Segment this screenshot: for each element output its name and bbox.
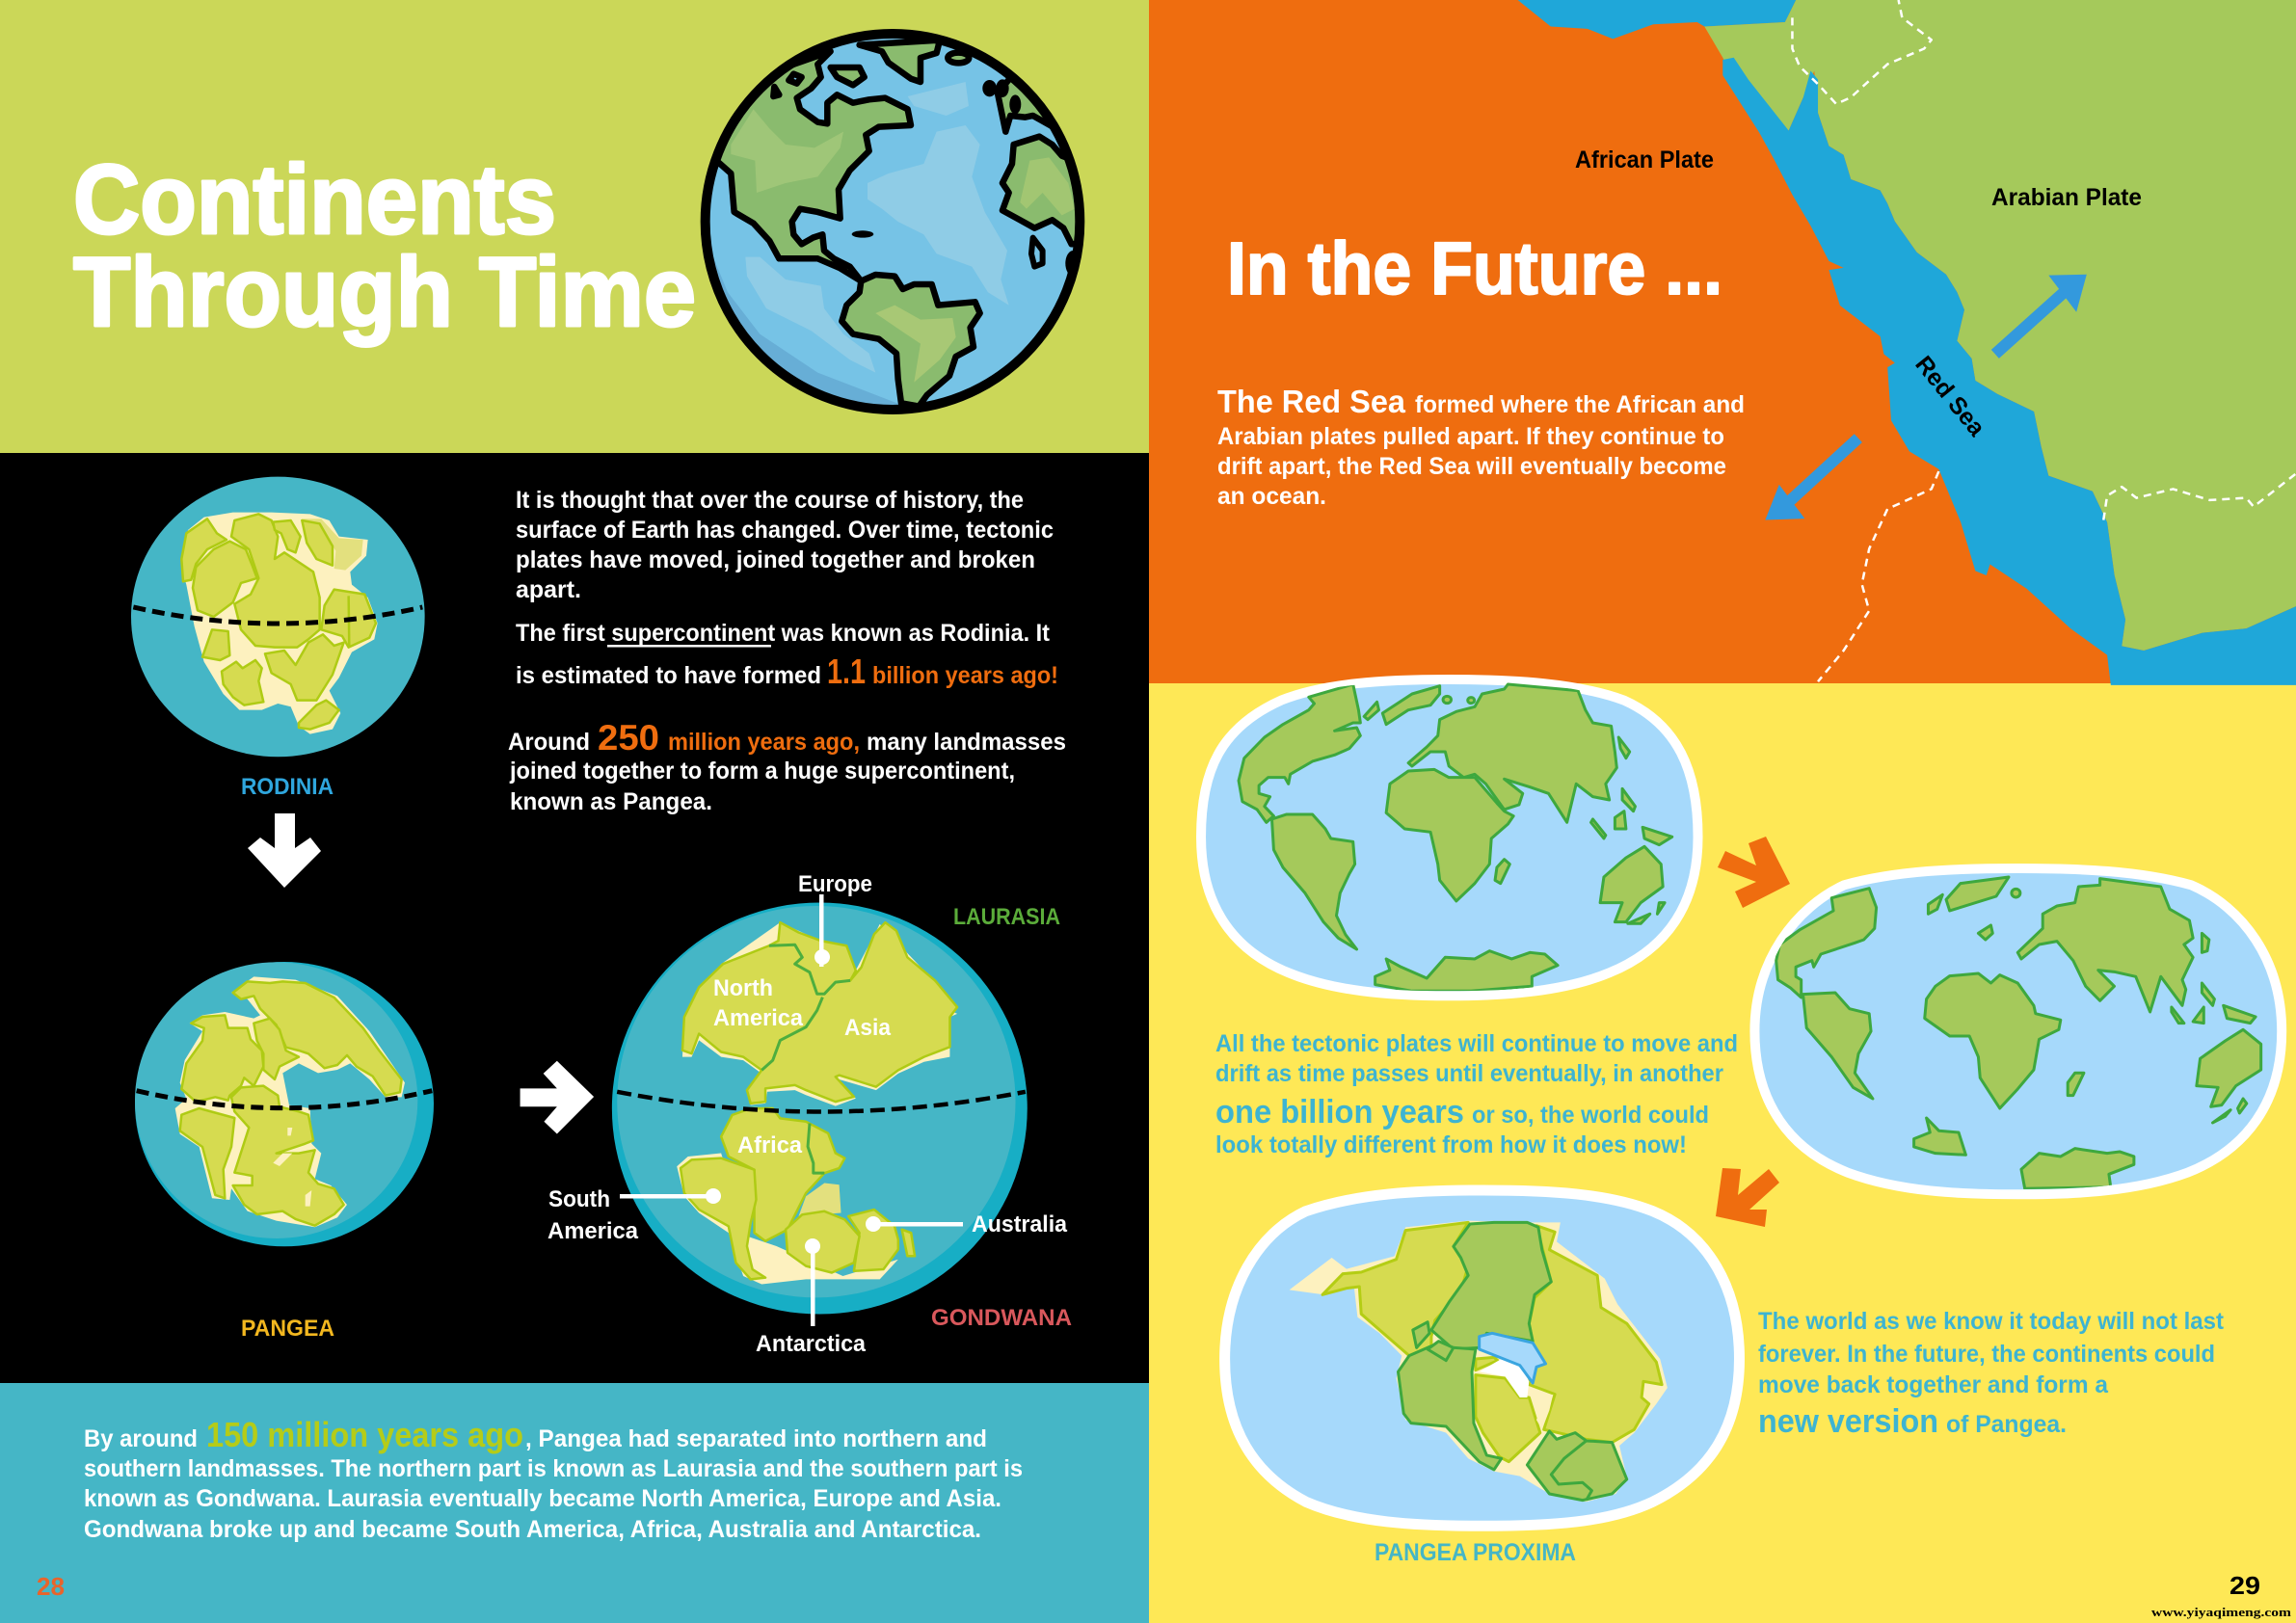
label: Laurasia: LAURASIA bbox=[953, 904, 1060, 930]
text block: 150 million years ago: , Pangea had separated into northern and bbox=[525, 1425, 987, 1452]
text block: 150 million years ago bbox=[84, 1415, 1023, 1543]
text block: intro and Rodinia: The first supercontinent was known as Rodinia. It bbox=[516, 620, 1051, 647]
text block: intro and Rodinia: billion years ago! bbox=[872, 662, 1058, 689]
icon: cartoon Earth globe bbox=[706, 34, 1101, 414]
text block: The Red Sea: an ocean. bbox=[1217, 483, 1326, 510]
text block: Pangea 250 million years ago: known as Pangea. bbox=[510, 788, 712, 815]
text block: new version of Pangea: of Pangea. bbox=[1946, 1411, 2067, 1438]
title: Continents bbox=[73, 145, 556, 254]
text block: The Red Sea: drift apart, the Red Sea will eventually become bbox=[1217, 453, 1726, 480]
text block: intro and Rodinia: It is thought that over the course of history, the bbox=[516, 487, 1024, 514]
arrow: Rodinia to Pangea bbox=[248, 813, 321, 888]
map: Pangea Proxima bbox=[1225, 1190, 1739, 1526]
text block: tectonic plates continue: one billion years bbox=[1215, 1094, 1464, 1131]
map: Red Sea region bbox=[1518, 0, 2296, 685]
text block: The Red Sea: The Red Sea bbox=[1217, 384, 1406, 419]
text block: 150 million years ago: Gondwana broke up and became South America, Africa, Australia and Antarctica. bbox=[84, 1516, 981, 1543]
text block: 150 million years ago: southern landmasses. The northern part is known as Laurasia and the southern part is bbox=[84, 1455, 1023, 1482]
text block: 150 million years ago: known as Gondwana. Laurasia eventually became North America, Europe and Asia. bbox=[84, 1485, 1001, 1512]
text block: new version of Pangea bbox=[1758, 1308, 2225, 1440]
text block: tectonic plates continue: or so, the world could bbox=[1472, 1102, 1709, 1129]
label: Asia: Asia bbox=[844, 1015, 892, 1041]
text block: intro and Rodinia: plates have moved, joined together and broken bbox=[516, 546, 1035, 573]
text block: new version of Pangea: forever. In the future, the continents could bbox=[1758, 1341, 2215, 1368]
panel: yellow future background bbox=[1149, 683, 2296, 1623]
panel: orange Red Sea background bbox=[1149, 0, 2296, 684]
label: Africa: Africa bbox=[737, 1132, 803, 1158]
arrow: African plate direction bbox=[1765, 439, 1858, 520]
map: Laurasia and Gondwana globe bbox=[612, 902, 1028, 1315]
label: Pangea Proxima: PANGEA PROXIMA bbox=[1375, 1539, 1576, 1566]
map: Rodinia globe bbox=[131, 477, 425, 757]
label: Arabian Plate: Arabian Plate bbox=[1991, 184, 2142, 211]
text block: Pangea 250 million years ago: joined together to form a huge supercontinent, bbox=[509, 758, 1015, 785]
label: Gondwana: GONDWANA bbox=[931, 1305, 1072, 1331]
panel: black history background bbox=[0, 453, 1149, 1384]
callout: South America pointer: America bbox=[547, 1218, 639, 1244]
callout: Antarctica pointer: Antarctica bbox=[756, 1331, 867, 1357]
callout: Australia pointer bbox=[866, 1211, 1068, 1237]
heading: In the Future: In the Future ... bbox=[1227, 227, 1722, 310]
label: Pangea: PANGEA bbox=[241, 1316, 334, 1342]
map: Pangea globe bbox=[135, 962, 434, 1246]
title bbox=[73, 145, 696, 347]
text block: The Red Sea: formed where the African and bbox=[1415, 391, 1745, 418]
text block: tectonic plates continue: All the tectonic plates will continue to move and bbox=[1215, 1030, 1738, 1057]
arrow: world today to drifting world bbox=[1718, 837, 1790, 908]
page number 28: 28 bbox=[37, 1572, 65, 1601]
callout: Australia pointer: Australia bbox=[972, 1211, 1068, 1237]
label: North America: America bbox=[713, 1005, 804, 1031]
text block: Pangea 250 million years ago: 250 bbox=[598, 718, 659, 758]
text block: intro and Rodinia: apart. bbox=[516, 576, 581, 603]
text block: new version of Pangea: move back together and form a bbox=[1758, 1371, 2109, 1398]
callout: South America pointer bbox=[547, 1186, 721, 1244]
page number 29: 29 bbox=[2229, 1571, 2260, 1600]
label: North America: North bbox=[713, 975, 773, 1001]
panel: lime title background bbox=[0, 0, 1149, 453]
title: Through Time bbox=[73, 237, 696, 347]
arrow: Arabian plate direction bbox=[1995, 275, 2087, 354]
text block: intro and Rodinia: is estimated to have formed bbox=[516, 662, 821, 689]
text block: intro and Rodinia: 1.1 bbox=[827, 652, 866, 691]
text block: tectonic plates continue bbox=[1215, 1030, 1738, 1158]
text block: Pangea 250 million years ago: million years ago, bbox=[668, 729, 860, 756]
text block: new version of Pangea: new version bbox=[1758, 1403, 1938, 1440]
text block: 150 million years ago: 150 million years ago bbox=[206, 1415, 523, 1454]
arrow: drifting world to Pangea Proxima bbox=[1716, 1168, 1779, 1227]
text block: Pangea 250 million years ago: Around bbox=[508, 729, 590, 756]
text block: The Red Sea bbox=[1217, 384, 1745, 510]
map: world today bbox=[1201, 679, 1698, 996]
callout: Europe pointer bbox=[798, 871, 872, 967]
panel: teal footer background bbox=[0, 1383, 1149, 1623]
arrow: Pangea to Laurasia and Gondwana bbox=[521, 1061, 594, 1134]
text block: Pangea 250 million years ago bbox=[508, 718, 1066, 815]
label: North America bbox=[713, 975, 804, 1031]
label: Red Sea: Red Sea bbox=[1909, 351, 1990, 442]
text block: intro and Rodinia: surface of Earth has changed. Over time, tectonic bbox=[516, 517, 1054, 544]
text block: The Red Sea: Arabian plates pulled apart. If they continue to bbox=[1217, 423, 1724, 450]
callout: South America pointer: South bbox=[548, 1186, 610, 1212]
text block: Pangea 250 million years ago: many landmasses bbox=[867, 729, 1066, 756]
text block: tectonic plates continue: look totally different from how it does now! bbox=[1215, 1131, 1687, 1158]
text block: new version of Pangea: The world as we know it today will not last bbox=[1758, 1308, 2225, 1335]
callout: Europe pointer: Europe bbox=[798, 871, 872, 897]
text block: intro and Rodinia bbox=[516, 487, 1058, 691]
watermark: www.yiyaqimeng.com bbox=[2151, 1605, 2291, 1619]
label: Rodinia: RODINIA bbox=[241, 774, 334, 800]
text block: 150 million years ago: By around bbox=[84, 1425, 198, 1452]
callout: Antarctica pointer bbox=[756, 1238, 867, 1357]
text block: tectonic plates continue: drift as time passes until eventually, in another bbox=[1215, 1060, 1723, 1087]
map: drifting world bbox=[1754, 868, 2282, 1194]
label: African Plate: African Plate bbox=[1575, 146, 1714, 173]
